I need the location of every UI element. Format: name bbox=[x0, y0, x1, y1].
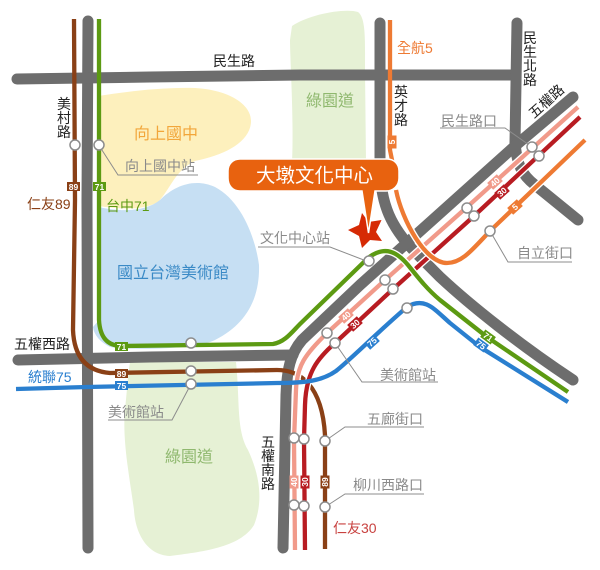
bus line 30 bbox=[304, 117, 580, 550]
bus line 71 bbox=[99, 19, 568, 392]
route badges: 89 bbox=[69, 182, 78, 192]
route badges: 30 bbox=[495, 185, 509, 199]
route badges: 75 bbox=[365, 335, 379, 349]
bus route labels: 台中71 bbox=[106, 198, 150, 214]
road labels: 南 bbox=[261, 462, 275, 478]
road labels: 北 bbox=[523, 58, 537, 74]
road labels: 路 bbox=[523, 72, 537, 88]
road labels: 民生路 bbox=[213, 53, 255, 69]
bus route labels: 仁友89 bbox=[27, 196, 71, 212]
leader lines bbox=[100, 128, 572, 507]
station labels: 自立街口 bbox=[517, 245, 573, 261]
area: 國立台灣美術館 bbox=[93, 183, 259, 349]
route badges: 30 bbox=[348, 317, 362, 331]
road labels: 權 bbox=[261, 448, 275, 464]
route badges: 89 bbox=[117, 369, 126, 379]
place labels: 國立台灣美術館 bbox=[117, 264, 229, 282]
station labels: 向上國中站 bbox=[125, 158, 195, 174]
route badges: 30 bbox=[300, 477, 310, 487]
station labels: 文化中心站 bbox=[260, 230, 330, 246]
station labels: 柳川西路口 bbox=[353, 477, 423, 493]
road labels: 五權路 bbox=[525, 81, 567, 121]
station labels: 五廊街口 bbox=[367, 411, 423, 427]
route badges: 40 bbox=[339, 309, 353, 323]
road labels: 五權西路 bbox=[14, 336, 70, 352]
route badges: 5 bbox=[387, 139, 397, 144]
marker star bbox=[348, 213, 382, 248]
route badges bbox=[67, 136, 523, 488]
route badges: 75 bbox=[474, 338, 488, 352]
route badges: 71 bbox=[95, 182, 104, 192]
bus route labels: 全航5 bbox=[397, 40, 433, 56]
road labels: 村 bbox=[57, 110, 71, 126]
bus route labels bbox=[27, 40, 433, 536]
road labels: 生 bbox=[523, 44, 537, 60]
route badges: 5 bbox=[510, 202, 520, 212]
route badges: 89 bbox=[320, 477, 330, 487]
callout banner: 大墩文化中心: 大墩文化中心 bbox=[256, 165, 373, 187]
route badges: 71 bbox=[117, 342, 126, 352]
place labels bbox=[117, 92, 354, 466]
road labels: 才 bbox=[394, 98, 408, 114]
route badges: 40 bbox=[289, 477, 299, 487]
bus route labels: 統聯75 bbox=[28, 369, 72, 385]
route badges: 75 bbox=[117, 381, 126, 391]
road labels: 五 bbox=[261, 434, 275, 450]
station labels bbox=[108, 113, 573, 493]
station labels: 美術館站 bbox=[380, 367, 436, 383]
road labels: 路 bbox=[261, 476, 275, 492]
route badges: 40 bbox=[488, 175, 502, 189]
road labels: 美 bbox=[57, 96, 71, 112]
road labels: 民 bbox=[523, 30, 537, 46]
route badges: 71 bbox=[481, 330, 495, 344]
bus line 75 bbox=[16, 303, 568, 402]
bus line 89 bbox=[73, 19, 325, 549]
bus route labels: 仁友30 bbox=[333, 520, 377, 536]
road labels bbox=[14, 30, 567, 492]
road labels: 英 bbox=[394, 84, 408, 100]
bus line 5 bbox=[390, 20, 585, 263]
area: 綠園道 south bbox=[124, 362, 259, 556]
place labels: 綠園道 bbox=[306, 92, 354, 110]
place labels: 綠園道 bbox=[165, 448, 213, 466]
area: 綠園道 north bbox=[290, 11, 366, 162]
callout banner: 大墩文化中心 bbox=[228, 159, 399, 233]
area: 向上國中 bbox=[98, 88, 251, 208]
station labels: 民生路口 bbox=[441, 113, 497, 129]
road labels: 路 bbox=[394, 112, 408, 128]
stations bbox=[70, 140, 544, 512]
place labels: 向上國中 bbox=[134, 125, 198, 143]
road labels: 路 bbox=[57, 124, 71, 140]
bus line 40 bbox=[294, 107, 578, 550]
station labels: 美術館站 bbox=[108, 404, 164, 420]
